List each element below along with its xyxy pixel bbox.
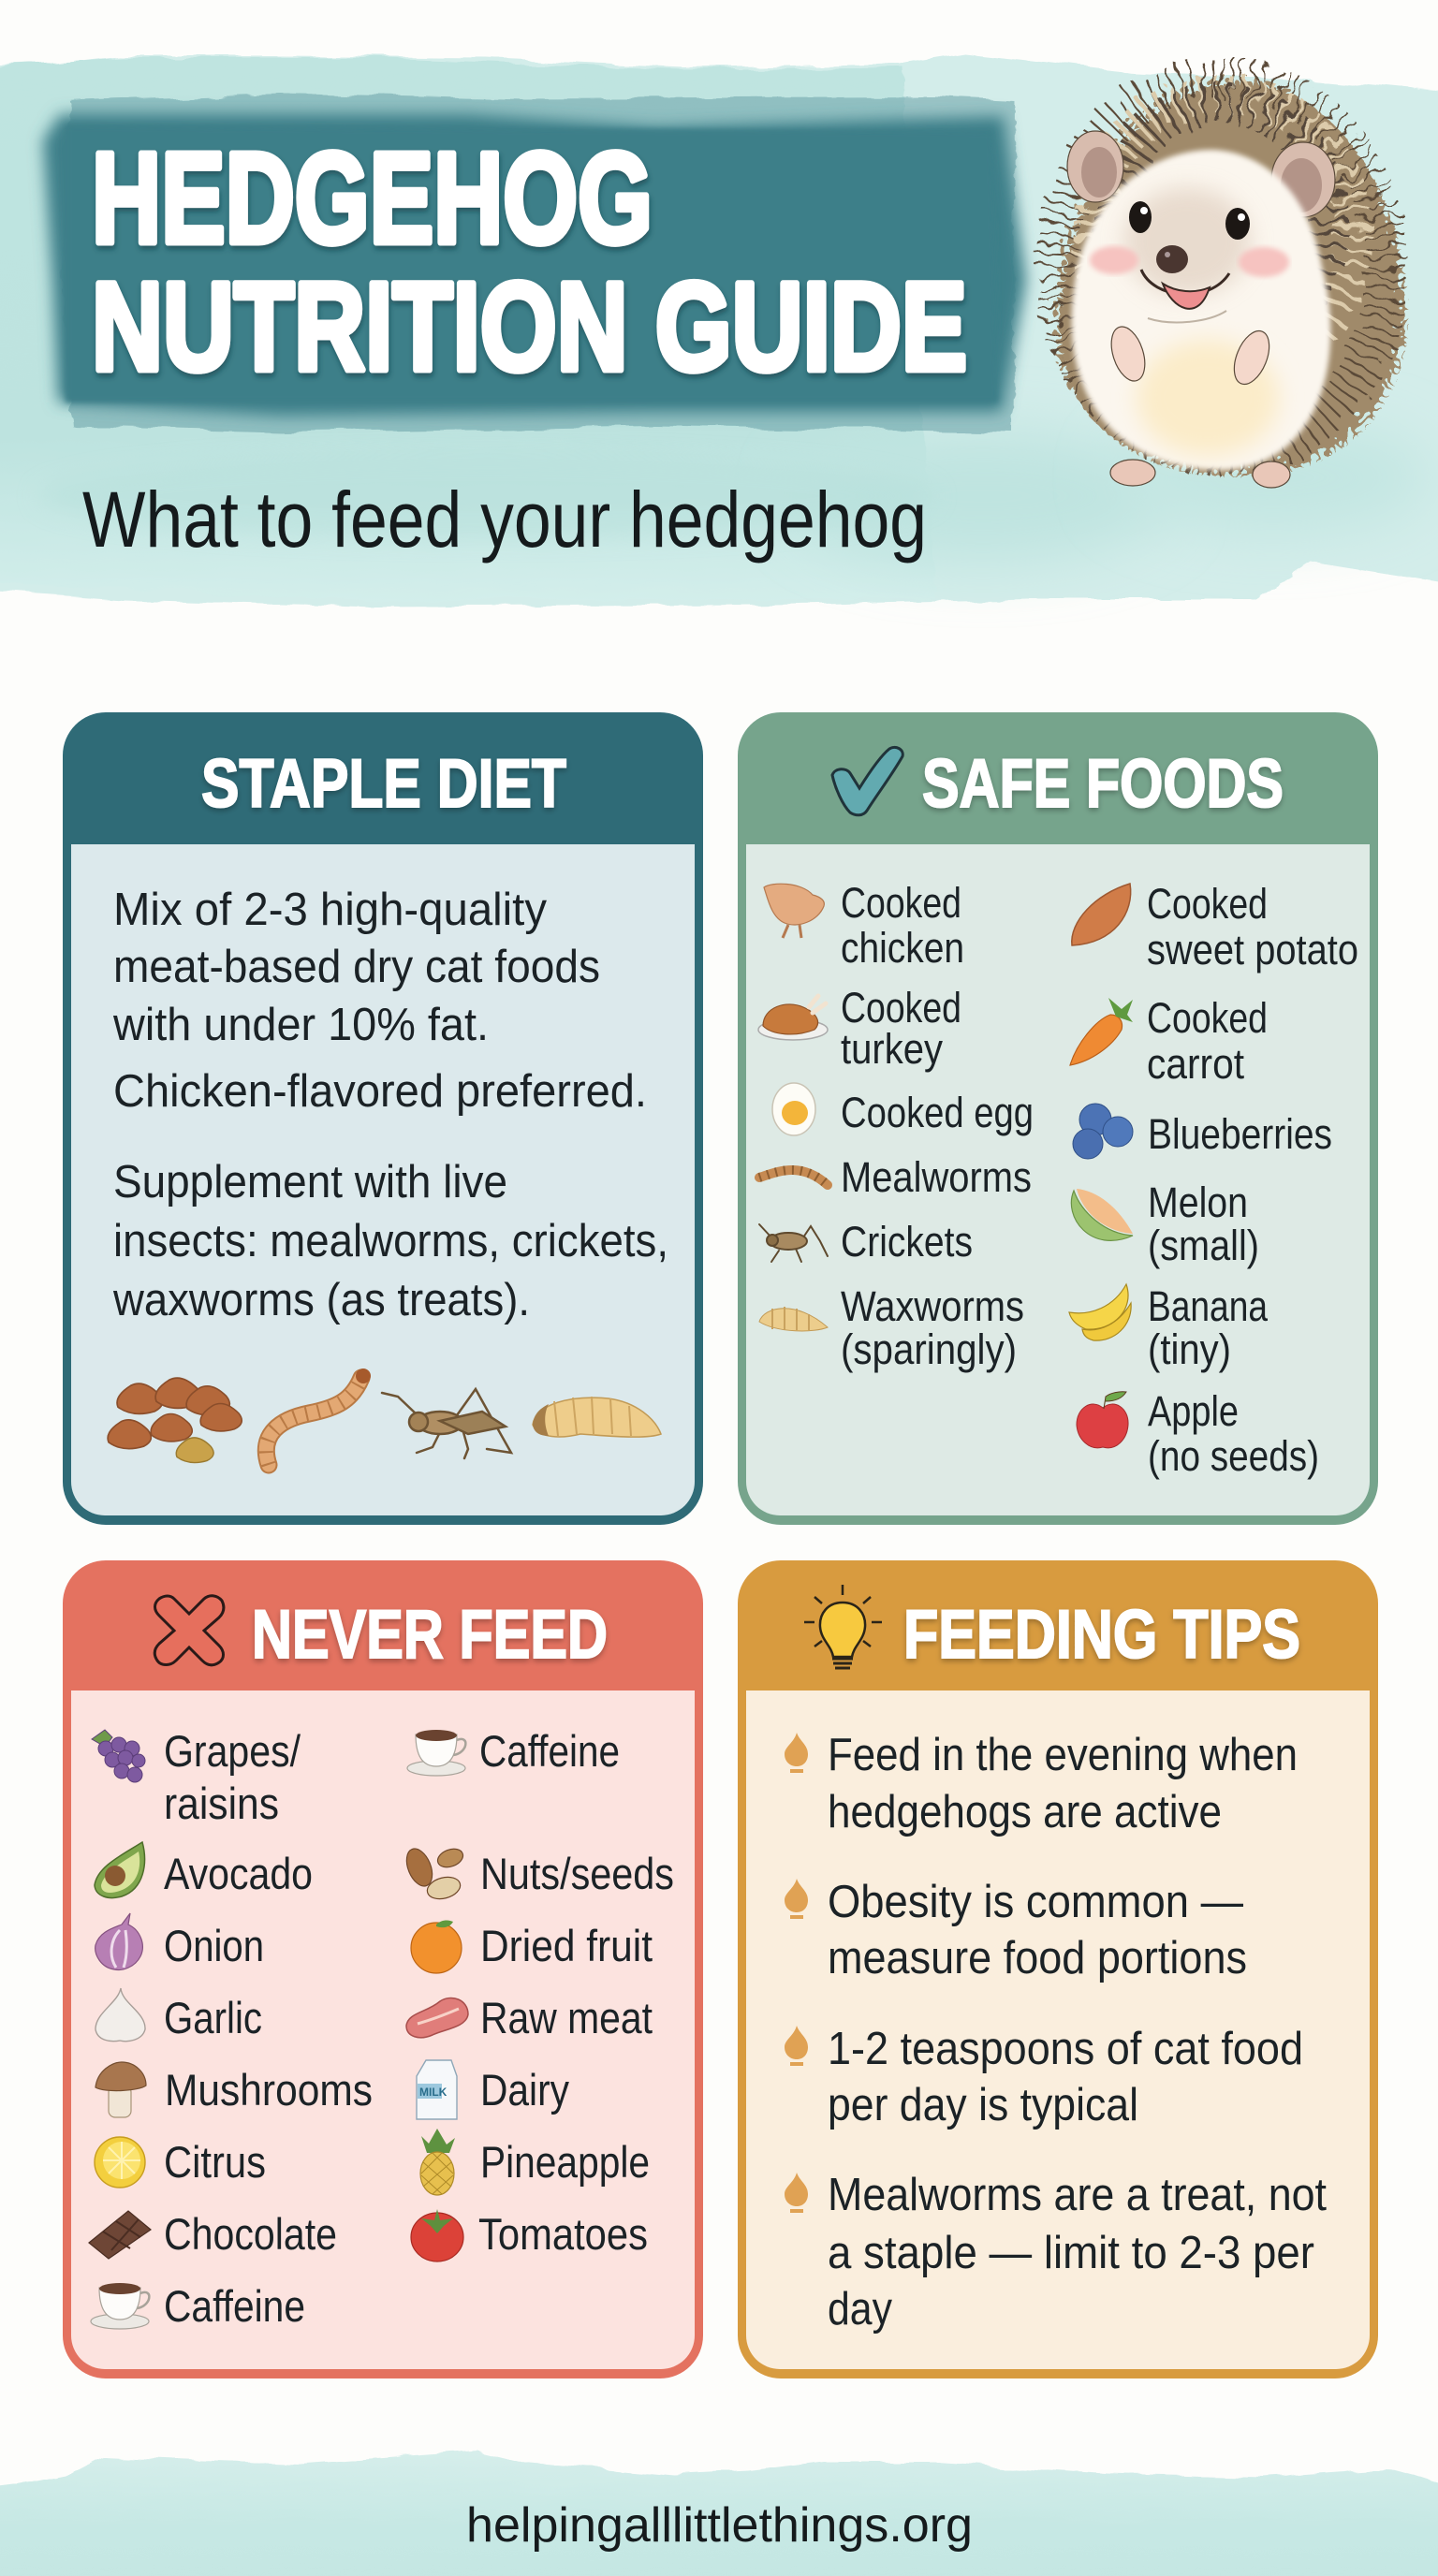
list: never feed right column: Nuts/seeds: [480, 1849, 674, 1898]
list: safe foods right column: [1147, 880, 1358, 1480]
icon: check mark: [832, 747, 902, 815]
icon: chocolate: [89, 2211, 151, 2259]
icon: mushroom: [95, 2062, 146, 2117]
list: safe foods left column: Cooked: [841, 879, 961, 927]
heading line 1: HEDGEHOG: [92, 126, 653, 271]
icon: cross mark: [154, 1596, 224, 1665]
icon: tomato: [411, 2209, 463, 2261]
icon: avocado: [95, 1842, 144, 1898]
list: safe foods right column: Apple: [1148, 1387, 1239, 1435]
icon: nuts: [402, 1845, 465, 1902]
watercolor wash: footer: [0, 2451, 1438, 2576]
icon: garlic: [95, 1988, 145, 2042]
heading line 2: NUTRITION GUIDE: [92, 257, 967, 397]
text block: staple description: [112, 885, 668, 1325]
list: safe foods right column: carrot: [1147, 1040, 1244, 1088]
text block: staple description: Mix of 2-3 high-quality: [113, 885, 547, 935]
list: never feed left column: Garlic: [164, 1993, 262, 2042]
watercolor wash: header: [0, 53, 1438, 607]
tips list: [785, 1730, 1327, 2334]
tip bullet 3: [785, 2026, 808, 2066]
list: safe foods right column: Melon: [1148, 1178, 1248, 1226]
panel: feeding tips: [738, 1560, 1378, 2378]
text block: staple description: Supplement with live: [113, 1157, 507, 1208]
icon: coffee cup: [91, 2283, 149, 2329]
list: safe foods left column: chicken: [841, 924, 964, 972]
text block: staple description: Chicken-flavored preferred.: [113, 1066, 647, 1117]
list: safe foods right column: Cooked: [1147, 880, 1268, 928]
icon: milk carton: MILK: [419, 2086, 448, 2099]
icon: melon: [1071, 1189, 1133, 1240]
list: never feed right column: Dairy: [480, 2065, 569, 2115]
hedgehog illustration: [1049, 71, 1395, 488]
title block: [43, 94, 1026, 432]
icon: blueberries: [1073, 1104, 1133, 1159]
ears: [1067, 131, 1335, 217]
list: safe foods right column: (tiny): [1148, 1325, 1231, 1373]
icon: onion: [95, 1913, 142, 1969]
list: never feed right column: Caffeine: [479, 1726, 620, 1776]
heading: feeding tips: FEEDING TIPS: [903, 1597, 1300, 1673]
tip text: Obesity is common —: [828, 1877, 1243, 1927]
list: never feed left column: Citrus: [164, 2137, 266, 2187]
tip text: hedgehogs are active: [828, 1787, 1222, 1837]
text block: staple description: meat-based dry cat foods: [113, 942, 600, 992]
icon: citrus: [95, 2137, 145, 2188]
tip text: Mealworms are a treat, not: [828, 2170, 1327, 2220]
icon: light bulb: [804, 1585, 882, 1668]
footer banner: [0, 2451, 1438, 2576]
list: safe foods right column: Blueberries: [1148, 1110, 1332, 1158]
heading: never feed: NEVER FEED: [252, 1597, 608, 1673]
icon: apple: [1077, 1392, 1128, 1448]
tip text: 1-2 teaspoons of cat food: [828, 2024, 1303, 2074]
icon: waxworm: [533, 1397, 661, 1437]
icon: cooked egg: [772, 1083, 815, 1135]
list: safe foods right column: Cooked: [1147, 994, 1268, 1042]
icon: milk carton: [417, 2060, 457, 2119]
icon: cat food kibble: [108, 1378, 242, 1463]
list: safe foods right column: Banana: [1148, 1282, 1269, 1330]
list: safe foods right column: sweet potato: [1147, 926, 1358, 973]
list: never feed left column: raisins: [164, 1778, 279, 1828]
panel: staple diet: [63, 712, 703, 1525]
list: safe foods left column: (sparingly): [841, 1325, 1017, 1373]
list: never feed right column: Pineapple: [480, 2137, 650, 2187]
icon: carrot: [1070, 998, 1133, 1065]
icon: cooked turkey: [758, 996, 828, 1040]
list: never feed left column: Avocado: [164, 1849, 313, 1898]
text block: staple description: with under 10% fat.: [112, 1000, 489, 1050]
tip text: per day is typical: [828, 2080, 1138, 2130]
list: never feed left column: [164, 1726, 373, 2331]
icon: mealworm small: [759, 1170, 828, 1185]
tip text: Feed in the evening when: [828, 1730, 1298, 1780]
icon: grapes: [92, 1730, 145, 1782]
text block: staple description: waxworms (as treats).: [112, 1275, 530, 1325]
icon: sweet potato: [1072, 884, 1131, 945]
panel: safe foods: [738, 712, 1378, 1525]
list: never feed left column: Grapes/: [164, 1726, 301, 1776]
list: never feed right column: [478, 1726, 674, 2259]
icon: mealworm: [266, 1368, 371, 1465]
icon: orange: [411, 1920, 462, 1973]
footer url: helpingalllittlethings.org: [466, 2498, 973, 2553]
list: safe foods left column: Crickets: [841, 1218, 973, 1266]
icon: cricket: [382, 1389, 511, 1458]
list: never feed right column: Tomatoes: [478, 2209, 648, 2259]
list: never feed left column: Caffeine: [164, 2281, 305, 2331]
list: safe foods left column: Cooked egg: [841, 1089, 1034, 1136]
tip text: measure food portions: [828, 1933, 1247, 1983]
icon: waxworm small: [759, 1307, 828, 1331]
tip text: a staple — limit to 2-3 per: [828, 2228, 1314, 2278]
list: safe foods left column: Cooked: [841, 984, 961, 1032]
heading: safe foods: SAFE FOODS: [922, 746, 1284, 822]
icon: coffee cup right: [407, 1730, 465, 1776]
icon: pineapple: [420, 2129, 455, 2195]
panel: never feed: [63, 1560, 703, 2378]
list: safe foods left column: Waxworms: [841, 1282, 1024, 1330]
icon: cooked chicken: [764, 884, 824, 938]
list: safe foods left column: [841, 879, 1034, 1373]
subtitle: What to feed your hedgehog: [82, 476, 927, 564]
tip text: [828, 1730, 1327, 2334]
tip bullet 2: [785, 1879, 808, 1919]
icon: banana: [1069, 1284, 1131, 1340]
icon: raw meat: [406, 1998, 468, 2038]
tip bullet 4: [785, 2173, 808, 2213]
tip text: day: [828, 2284, 892, 2334]
list: safe foods left column: Mealworms: [841, 1153, 1032, 1201]
tip bullet 1: [785, 1733, 808, 1773]
text block: staple description: insects: mealworms, crickets,: [113, 1216, 668, 1266]
list: never feed left column: Mushrooms: [165, 2065, 373, 2115]
list: never feed right column: Dried fruit: [480, 1921, 653, 1970]
heading: staple diet: STAPLE DIET: [201, 746, 566, 822]
list: never feed left column: Chocolate: [164, 2209, 337, 2259]
list: safe foods right column: (no seeds): [1148, 1432, 1319, 1480]
list: safe foods right column: (small): [1148, 1222, 1259, 1269]
list: never feed right column: Raw meat: [480, 1993, 653, 2042]
icon: cricket small: [759, 1224, 828, 1262]
header banner: [0, 53, 1438, 607]
list: never feed left column: Onion: [164, 1921, 264, 1970]
list: safe foods left column: turkey: [841, 1025, 943, 1073]
